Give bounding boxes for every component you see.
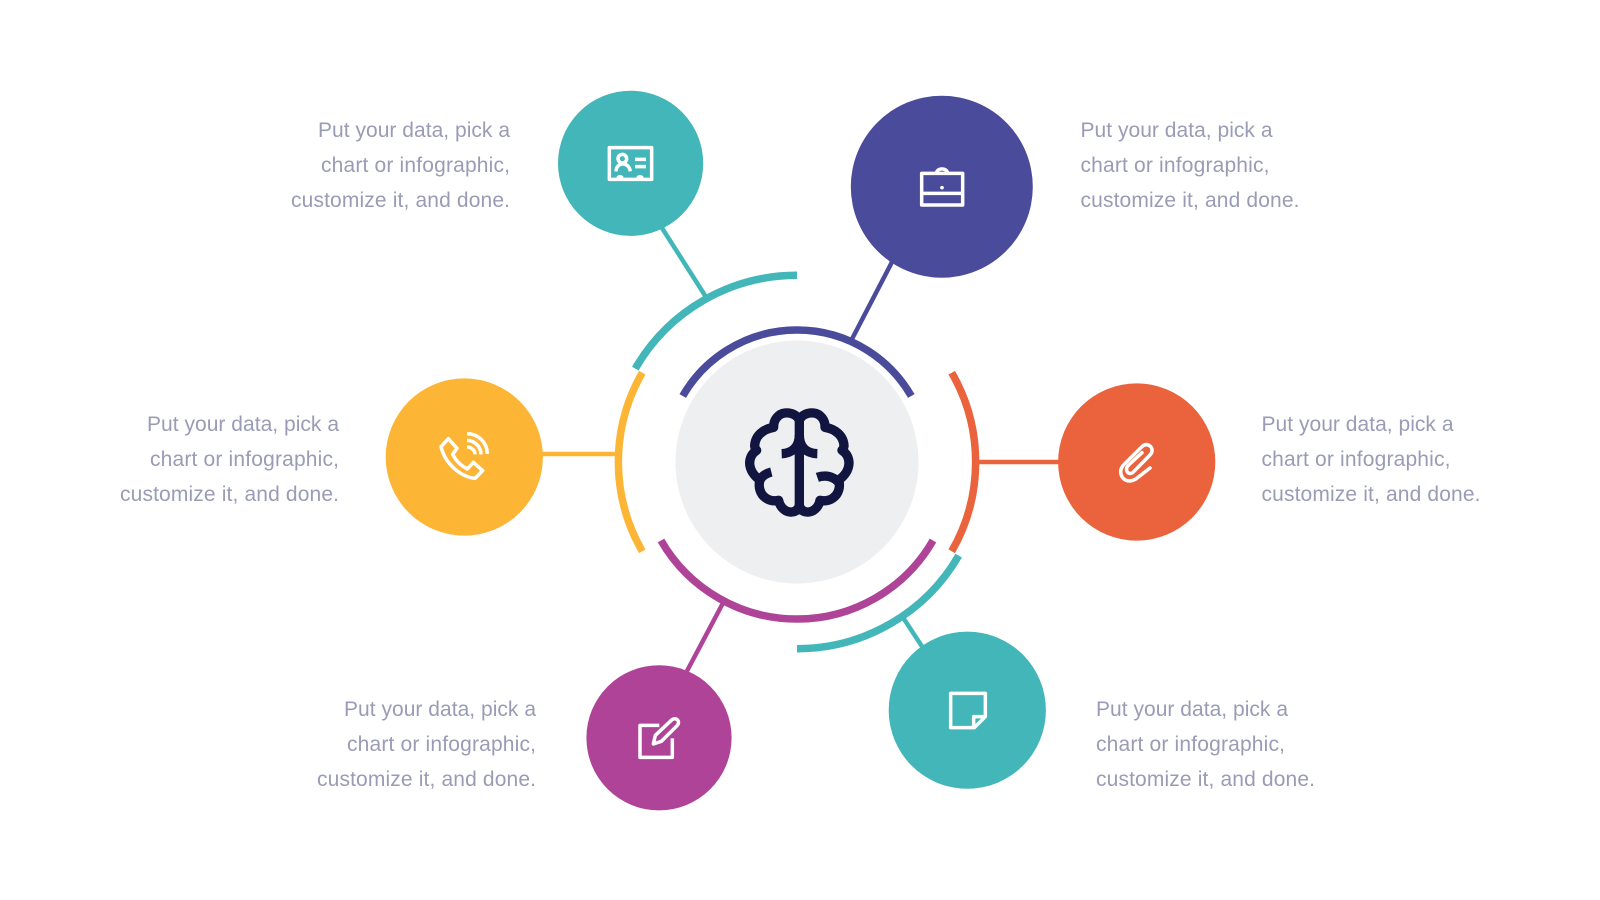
icon: paperclip bbox=[1121, 445, 1152, 481]
text block: middle left: chart or infographic, bbox=[150, 448, 339, 471]
node: paperclip bbox=[1058, 383, 1215, 541]
arc: indigo inner bbox=[683, 330, 911, 396]
node disc bbox=[558, 91, 703, 236]
node disc bbox=[889, 632, 1046, 789]
icon: brain bbox=[750, 413, 849, 512]
text block: top right: Put your data, pick a bbox=[1080, 119, 1273, 142]
connector: purple bbox=[687, 603, 723, 671]
connector: teal bottom bbox=[904, 619, 923, 648]
node: briefcase bbox=[851, 96, 1033, 278]
text block: middle right bbox=[1262, 413, 1480, 506]
text block: bottom right: chart or infographic, bbox=[1096, 733, 1285, 756]
connector: teal top bbox=[662, 228, 706, 297]
text block: bottom left: customize it, and done. bbox=[317, 768, 536, 791]
text block: top right: customize it, and done. bbox=[1080, 189, 1300, 212]
text block: top left: Put your data, pick a bbox=[318, 119, 510, 142]
connector: orange bbox=[979, 460, 1060, 464]
hub disc bbox=[676, 340, 918, 584]
icon: sticky note bbox=[951, 693, 985, 728]
text block: bottom left: chart or infographic, bbox=[347, 733, 536, 756]
text block: middle left: customize it, and done. bbox=[120, 483, 339, 506]
text block: bottom right bbox=[1096, 698, 1315, 791]
node: edit note bbox=[586, 665, 732, 810]
node disc bbox=[386, 378, 543, 536]
node disc bbox=[1058, 383, 1215, 541]
node: contact card bbox=[558, 91, 703, 236]
arc: orange bbox=[952, 373, 976, 551]
connector: indigo bbox=[852, 262, 892, 339]
node disc bbox=[851, 96, 1033, 278]
central hub bbox=[676, 340, 918, 584]
text block: middle right: chart or infographic, bbox=[1262, 448, 1450, 471]
text block: middle right: Put your data, pick a bbox=[1262, 413, 1454, 436]
text block: top left: customize it, and done. bbox=[291, 189, 510, 212]
arc: yellow bbox=[618, 373, 642, 551]
text block: top right bbox=[1080, 119, 1300, 212]
text block: middle left: Put your data, pick a bbox=[147, 413, 339, 436]
text block: top left: chart or infographic, bbox=[321, 154, 510, 177]
text block: bottom right: Put your data, pick a bbox=[1096, 698, 1288, 721]
text block: bottom left bbox=[317, 698, 536, 791]
text block: middle right: customize it, and done. bbox=[1262, 483, 1480, 506]
icon: contact card bbox=[609, 148, 652, 179]
node: sticky note bbox=[889, 632, 1046, 789]
connector: yellow bbox=[542, 452, 617, 456]
arc: purple bbox=[661, 540, 933, 619]
text block: bottom right: customize it, and done. bbox=[1096, 768, 1315, 791]
arc: teal bottom bbox=[797, 556, 959, 649]
node disc bbox=[586, 665, 732, 810]
arc: teal top bbox=[635, 275, 797, 369]
icon: phone bbox=[441, 434, 487, 478]
text block: middle left bbox=[120, 413, 339, 506]
text block: bottom left: Put your data, pick a bbox=[344, 698, 536, 721]
icon: pencil in square bbox=[640, 719, 679, 757]
text block: top left bbox=[291, 119, 510, 212]
text block: top right: chart or infographic, bbox=[1080, 154, 1270, 177]
node: phone bbox=[386, 378, 543, 536]
icon: briefcase bbox=[922, 169, 963, 205]
